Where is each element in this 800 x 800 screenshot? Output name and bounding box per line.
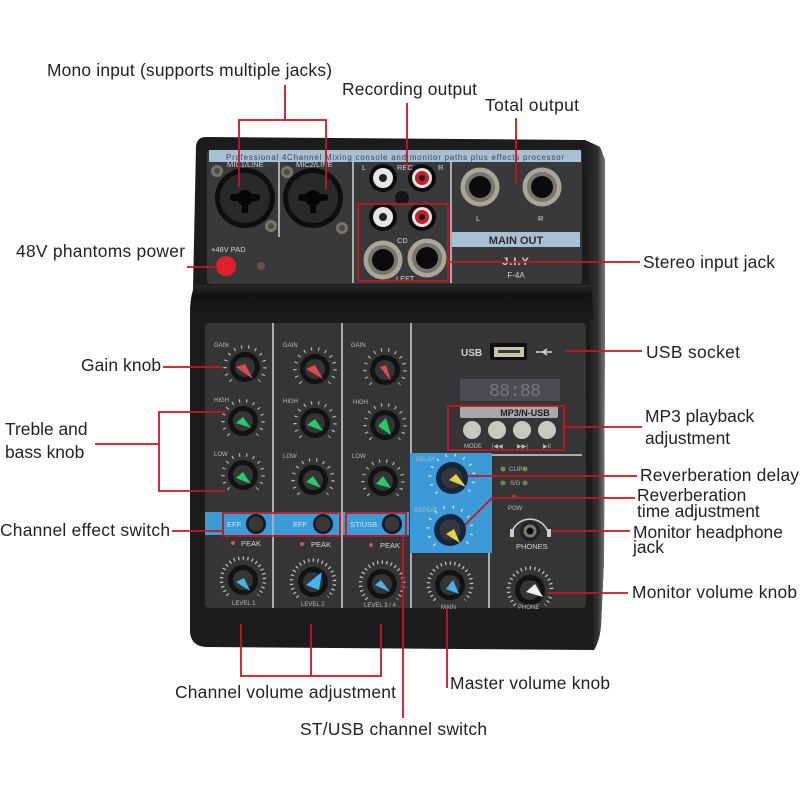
channel 1 knobs: LEVEL 1 (232, 601, 256, 607)
device body (190, 137, 605, 650)
total output line (515, 118, 517, 183)
phantom power line (187, 266, 217, 268)
master volume line (446, 608, 448, 688)
label: reverberation time: Reverberation (637, 485, 746, 505)
channel 2 knobs: GAIN (283, 343, 298, 349)
header strip: Professional 4Channel Mixing console and monitor paths plus effects processor (226, 153, 564, 162)
mp3 controls: ▶▶| (517, 444, 528, 450)
mp3 controls: ▶II (543, 444, 551, 450)
rca and line jacks: R (438, 163, 444, 172)
label: gain knob: Gain knob (81, 355, 161, 375)
channel 1 knobs (214, 343, 265, 607)
mp3 frame (448, 406, 642, 450)
label: st usb switch: ST/USB channel switch (300, 719, 487, 739)
channel 2 knobs: LEVEL 2 (301, 602, 325, 608)
channel 2 knobs: HIGH (283, 399, 298, 405)
display: 88:88 (489, 382, 541, 402)
mono input bracket (239, 85, 326, 190)
rca and line jacks: LEFT (396, 274, 415, 283)
channel switches: ST/USB (350, 520, 377, 529)
channel switches: EFF (227, 520, 242, 529)
effects panel: REPEAT (414, 508, 438, 514)
rca and line jacks: L (362, 163, 366, 172)
display (460, 379, 560, 402)
mp3 controls: MP3/N-USB (500, 408, 550, 418)
mixer device (190, 137, 605, 650)
rca and line jacks (362, 163, 446, 283)
label: recording output: Recording output (342, 79, 477, 99)
phones line (552, 530, 630, 532)
channel 1 knobs: HIGH (214, 398, 229, 404)
channel volume bracket (241, 624, 381, 676)
48V phantom button: +48V PAD (211, 245, 246, 254)
effects panel (410, 453, 492, 553)
status leds (500, 466, 528, 512)
mp3 controls (460, 406, 558, 450)
label: stereo input: Stereo input jack (643, 252, 775, 272)
mp3 controls: MODE (464, 444, 482, 450)
main outputs: MAIN OUT (489, 235, 543, 247)
rca and line jacks: REC (397, 163, 413, 172)
label: treble and bass: Treble and (5, 419, 88, 439)
status leds: CLIP (509, 467, 522, 473)
stereo input frame (358, 204, 640, 281)
panel: rear connectors (207, 150, 582, 284)
main outputs: J.I.Y (502, 256, 530, 268)
main outputs: R (538, 214, 544, 223)
phone knob line (547, 592, 628, 594)
status leds: S/G (510, 481, 521, 487)
mp3 controls: |◀◀ (492, 444, 503, 450)
mic inputs: MIC2/LINE (296, 160, 333, 169)
label: reverberation time: time adjustment (637, 501, 760, 521)
delay line (467, 475, 637, 477)
label: monitor headphone: jack (632, 537, 664, 557)
main outputs: F-4A (507, 271, 525, 280)
label: total output: Total output (485, 95, 579, 115)
gain line (163, 366, 222, 368)
recording output line (406, 103, 408, 170)
phone knob (508, 568, 552, 611)
channel switches (227, 514, 402, 534)
peak indicators: PEAK (241, 539, 261, 548)
repeat line (465, 498, 635, 525)
mic inputs (211, 160, 348, 234)
label: reverberation delay: Reverberation delay (640, 465, 799, 485)
panel: channel strips and controls (205, 323, 586, 611)
effects panel: DELAY (416, 457, 435, 463)
channel 3 knobs: LOW (352, 454, 366, 460)
st usb line (402, 536, 404, 718)
channel 3 knobs: GAIN (351, 343, 366, 349)
label: channel volume: Channel volume adjustment (175, 682, 396, 702)
effect switch strip (205, 512, 409, 535)
label: phantom power: 48V phantoms power (16, 241, 185, 261)
label: mono input: Mono input (supports multiple jacks) (47, 60, 332, 80)
rca and line jacks: CD (397, 236, 408, 245)
channel 3 knobs (351, 343, 405, 609)
main outputs (452, 168, 580, 280)
label: mp3 adjustment: MP3 playback (645, 406, 754, 426)
peak indicators (231, 539, 400, 550)
label: channel effect: Channel effect switch (0, 520, 170, 540)
label: treble and bass: bass knob (5, 442, 84, 462)
channel 1 knobs: GAIN (214, 343, 229, 349)
label: monitor headphone: Monitor headphone (633, 522, 783, 542)
status leds: POW (508, 506, 523, 512)
channel switches: EFF (293, 520, 308, 529)
mic inputs: MIC1/LINE (227, 160, 264, 169)
treble bass bracket (95, 412, 225, 491)
peak indicators: PEAK (380, 541, 400, 550)
headphone jack: PHONES (516, 542, 548, 551)
channel 3 knobs: HIGH (353, 400, 368, 406)
label: usb socket: USB socket (646, 342, 740, 362)
channel 3 knobs: LEVEL 3 / 4 (364, 603, 396, 609)
phone knob: PHONE (518, 605, 539, 611)
48V phantom button (211, 245, 265, 276)
main knob: MAIN (441, 605, 456, 611)
usb socket (461, 343, 552, 360)
main outputs: L (476, 214, 480, 223)
peak indicators: PEAK (311, 540, 331, 549)
channel effect frames (172, 513, 406, 536)
channel 2 knobs: LOW (283, 454, 297, 460)
channel 1 knobs: LOW (214, 452, 228, 458)
channel 2 knobs (283, 343, 335, 608)
headphone jack (510, 519, 551, 551)
callout lines and frames (95, 85, 642, 718)
main knob (428, 563, 472, 611)
usb line (565, 350, 642, 352)
label: master volume: Master volume knob (450, 673, 610, 693)
header strip (209, 150, 581, 162)
label: mp3 adjustment: adjustment (645, 428, 730, 448)
usb socket: USB (461, 348, 482, 359)
label: monitor volume: Monitor volume knob (632, 582, 797, 602)
